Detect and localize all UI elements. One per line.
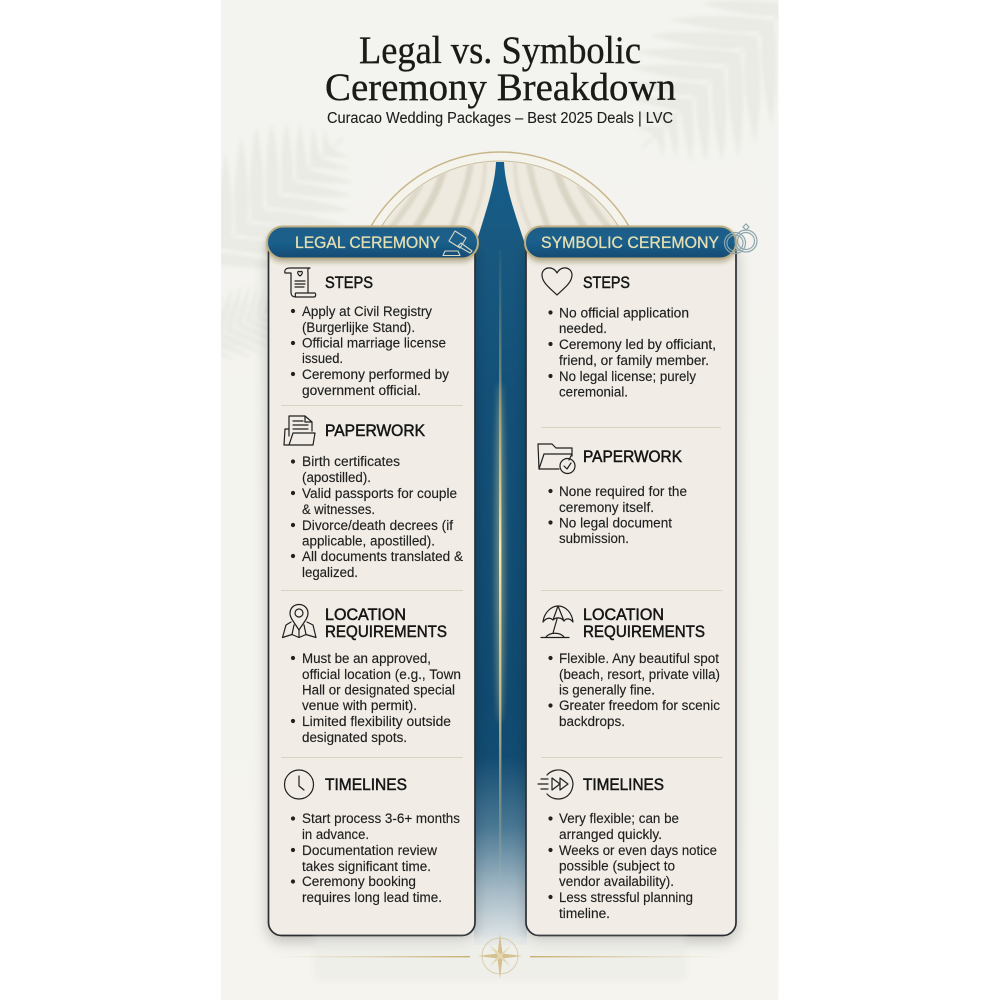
steps section: STEPS xyxy=(325,274,373,292)
arch with curtains xyxy=(370,151,630,240)
steps section: STEPS xyxy=(583,274,630,292)
title: Ceremony Breakdown xyxy=(325,66,676,109)
steps list: Apply at Civil Registry xyxy=(302,304,433,320)
poster background xyxy=(221,0,778,1000)
paperwork list: Birth certificates xyxy=(302,454,400,470)
location list: venue with permit). xyxy=(302,698,417,714)
title xyxy=(325,29,676,109)
icon: beach umbrella xyxy=(541,606,573,638)
paperwork section xyxy=(538,444,687,547)
icon: folder with check xyxy=(538,444,575,474)
paperwork list: Divorce/death decrees (if xyxy=(302,518,453,534)
timelines list xyxy=(302,811,460,906)
location list: backdrops. xyxy=(559,714,625,730)
paperwork list: All documents translated & xyxy=(302,549,464,565)
steps list: No official application xyxy=(559,306,689,322)
timelines list: requires long lead time. xyxy=(302,890,442,906)
bullets xyxy=(291,656,295,723)
location section xyxy=(282,604,461,746)
timelines section: TIMELINES xyxy=(583,776,664,794)
paperwork list: legalized. xyxy=(302,565,358,581)
bullets xyxy=(291,459,295,558)
paperwork list: Valid passports for couple xyxy=(302,486,457,502)
paperwork list xyxy=(559,484,687,547)
bullets xyxy=(291,309,295,376)
timelines list: possible (subject to xyxy=(559,858,675,874)
steps list: (Burgerlijke Stand). xyxy=(302,320,415,336)
timelines list: timeline. xyxy=(559,906,610,922)
steps list: issued. xyxy=(302,351,343,367)
steps list xyxy=(302,304,450,399)
steps list: Ceremony led by officiant, xyxy=(559,337,716,353)
location list xyxy=(302,651,461,746)
centre gold line xyxy=(495,250,505,890)
bullets xyxy=(291,816,295,884)
decorative palm fronds xyxy=(221,2,778,355)
paperwork list: ceremony itself. xyxy=(559,500,654,516)
location list: is generally fine. xyxy=(559,682,655,698)
bullets xyxy=(548,656,553,708)
location heading: LOCATION xyxy=(583,606,664,624)
steps list: government official. xyxy=(302,383,421,399)
icon: interlocked rings xyxy=(724,224,757,254)
location list: official location (e.g., Town xyxy=(302,667,461,683)
steps list: needed. xyxy=(559,321,607,337)
paperwork section xyxy=(284,416,464,581)
bullets xyxy=(548,489,553,525)
bullets xyxy=(548,816,553,899)
paperwork list: (apostilled). xyxy=(302,470,371,486)
icon: map pin xyxy=(282,604,316,638)
steps list: No legal license; purely xyxy=(559,369,697,385)
icon: fast-forward clock xyxy=(538,770,573,799)
icon: folder with documents xyxy=(284,416,315,445)
paperwork list: submission. xyxy=(559,531,629,547)
timelines section xyxy=(284,770,460,906)
title: Legal vs. Symbolic xyxy=(359,29,641,72)
icon: clock xyxy=(284,770,314,799)
icon: gavel xyxy=(443,231,472,256)
steps section xyxy=(542,268,716,400)
timelines list: in advance. xyxy=(302,827,369,843)
location list: Flexible. Any beautiful spot xyxy=(559,651,719,667)
bullets xyxy=(548,310,553,378)
legal banner: LEGAL CEREMONY xyxy=(295,234,440,252)
location heading: REQUIREMENTS xyxy=(325,623,447,641)
symbolic banner: SYMBOLIC CEREMONY xyxy=(541,234,719,252)
location list: designated spots. xyxy=(302,730,407,746)
location list: Greater freedom for scenic xyxy=(559,698,720,714)
location heading xyxy=(325,606,447,641)
paperwork section: PAPERWORK xyxy=(325,422,425,440)
timelines list xyxy=(559,811,717,922)
panel: symbolic ceremony xyxy=(525,224,757,936)
paperwork list xyxy=(302,454,464,581)
timelines list: Less stressful planning xyxy=(559,890,693,906)
location heading: REQUIREMENTS xyxy=(583,623,705,641)
timelines list: Weeks or even days notice xyxy=(559,843,717,859)
paperwork list: No legal document xyxy=(559,516,672,532)
location heading xyxy=(583,606,705,641)
footer ornament xyxy=(275,934,725,980)
paperwork list: applicable, apostilled). xyxy=(302,534,435,550)
timelines list: Start process 3-6+ months xyxy=(302,811,460,827)
paperwork section: PAPERWORK xyxy=(583,448,682,466)
timelines list: takes significant time. xyxy=(302,859,431,875)
location list: (beach, resort, private villa) xyxy=(559,667,720,683)
timelines list: vendor availability). xyxy=(559,874,674,890)
steps list: ceremonial. xyxy=(559,384,628,400)
timelines list: arranged quickly. xyxy=(559,827,662,843)
steps section xyxy=(285,268,450,399)
location list xyxy=(559,651,720,730)
icon: heart xyxy=(542,268,572,295)
paperwork list: & witnesses. xyxy=(302,502,375,518)
steps list: Ceremony performed by xyxy=(302,367,450,383)
location list: Limited flexibility outside xyxy=(302,714,451,730)
timelines section xyxy=(538,770,717,922)
centre blue curtain column xyxy=(474,162,527,945)
timelines list: Documentation review xyxy=(302,843,438,859)
timelines list: Very flexible; can be xyxy=(559,811,679,827)
location list: Hall or designated special xyxy=(302,682,455,698)
steps list: Official marriage license xyxy=(302,336,446,352)
timelines list: Ceremony booking xyxy=(302,874,416,890)
steps list xyxy=(559,306,716,400)
location list: Must be an approved, xyxy=(302,651,431,667)
paperwork list: None required for the xyxy=(559,484,687,500)
steps list: friend, or family member. xyxy=(559,353,709,369)
timelines section: TIMELINES xyxy=(325,776,407,794)
subtitle: Curacao Wedding Packages – Best 2025 Deals | LVC xyxy=(327,110,673,127)
icon: compass star xyxy=(478,934,522,979)
icon: scroll xyxy=(285,268,316,297)
panel: legal ceremony xyxy=(267,226,478,936)
legal banner xyxy=(267,226,478,258)
location section xyxy=(541,606,720,730)
symbolic banner xyxy=(525,226,736,258)
location heading: LOCATION xyxy=(325,606,406,624)
